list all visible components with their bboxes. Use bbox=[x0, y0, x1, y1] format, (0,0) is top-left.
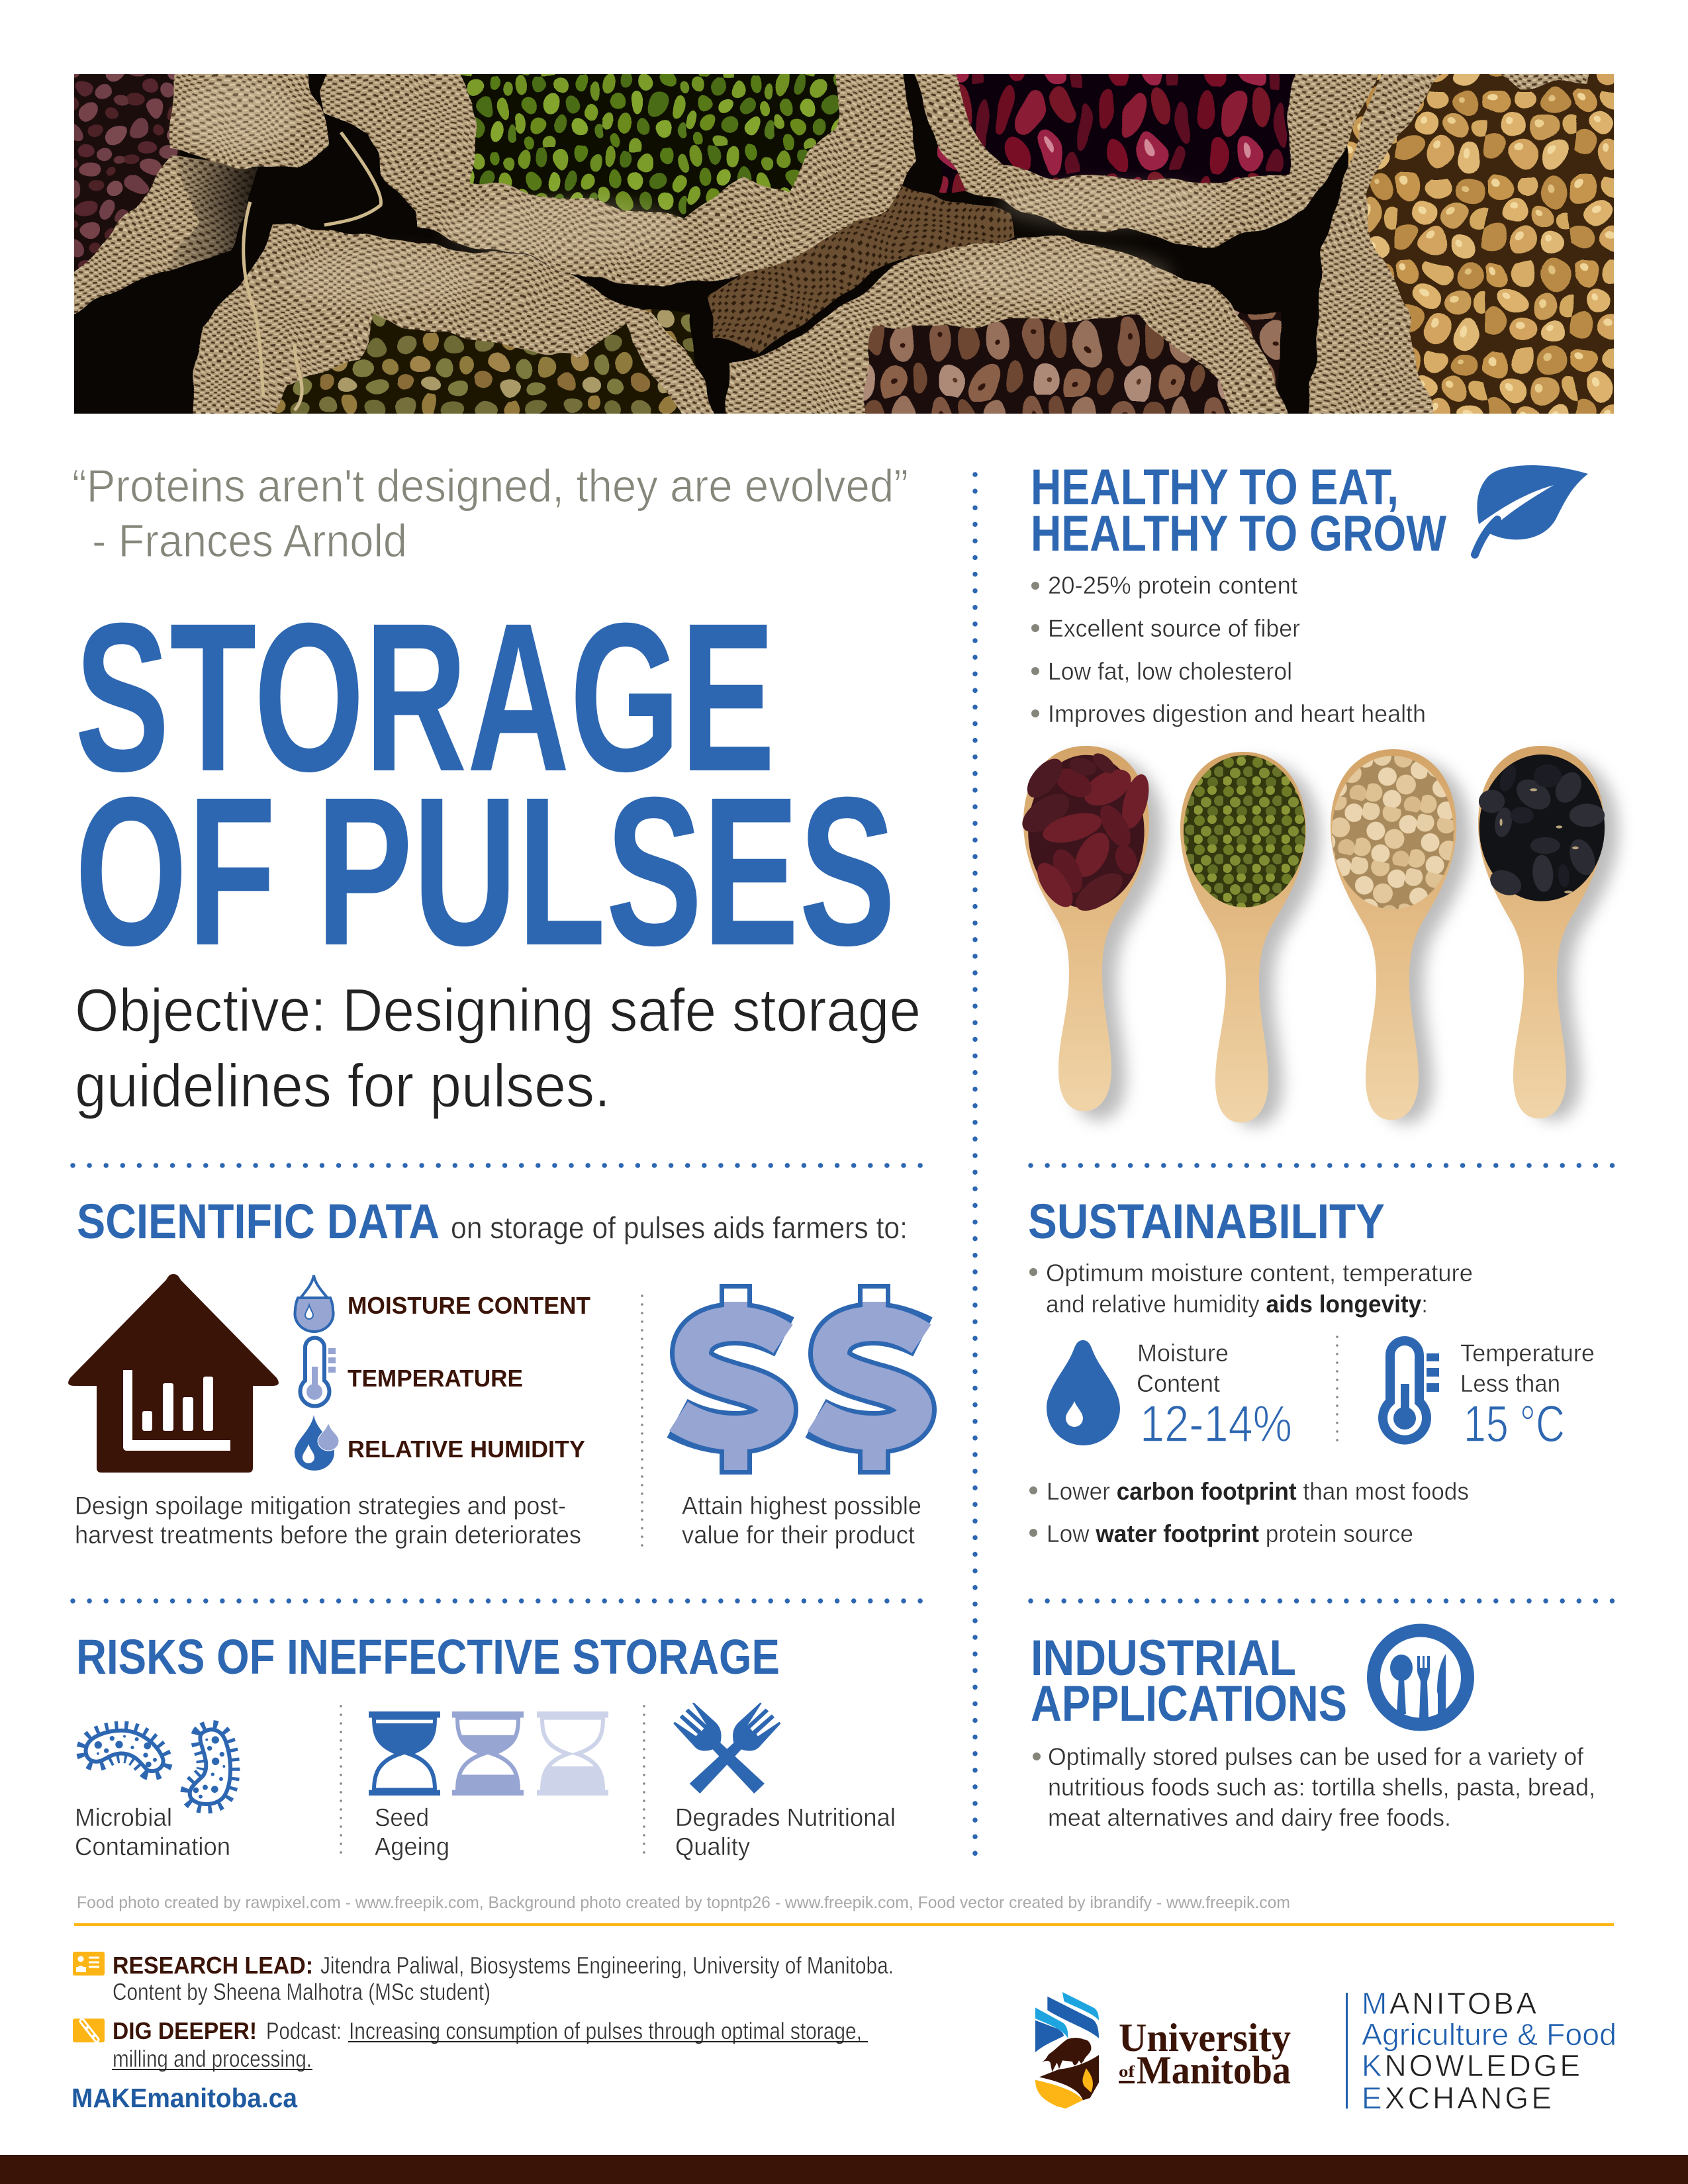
stat: temperature: Less than bbox=[1460, 1370, 1560, 1397]
bullet list: health benefits: 20-25% protein content bbox=[1048, 572, 1298, 599]
label: degrades nutritional quality: Degrades Nutritional bbox=[675, 1804, 896, 1832]
heading: healthy to eat: HEALTHY TO EAT, bbox=[1031, 459, 1399, 516]
text: industrial uses bullet: nutritious foods such as: tortilla shells, pasta, bread, bbox=[1048, 1774, 1595, 1801]
text: highest value bbox=[682, 1492, 921, 1549]
text: footprint bullets: Lower carbon footprint than most foods bbox=[1047, 1478, 1469, 1505]
bullet list: health benefits: Improves digestion and heart health bbox=[1048, 700, 1426, 727]
icon: bacteria bbox=[86, 1729, 230, 1804]
heading: healthy to eat: HEALTHY TO GROW bbox=[1031, 506, 1446, 562]
heading: scientific data: SCIENTIFIC DATA bbox=[77, 1194, 440, 1249]
icon: dollar signs bbox=[677, 1284, 923, 1475]
heading: industrial applications bbox=[1031, 1630, 1347, 1732]
icon: water drop bbox=[1047, 1340, 1120, 1445]
podcast text: dig deeper: Increasing consumption of pulses through optimal storage, bbox=[349, 2017, 862, 2044]
stat: temperature: 15 °C bbox=[1464, 1394, 1565, 1453]
icon: link bbox=[73, 2019, 105, 2042]
podcast text: dig deeper: DIG DEEPER! bbox=[113, 2017, 257, 2044]
text: longevity bullet: and relative humidity aids longevity: bbox=[1046, 1291, 1428, 1318]
label: moisture content: MOISTURE CONTENT bbox=[348, 1292, 590, 1319]
icon: plate and cutlery bbox=[1374, 1631, 1468, 1725]
heading: scientific data: on storage of pulses aids farmers to: bbox=[451, 1210, 908, 1245]
label: microbial contamination bbox=[75, 1804, 230, 1861]
bullet list: health benefits: Excellent source of fiber bbox=[1048, 615, 1300, 642]
stat: moisture content: Content bbox=[1137, 1370, 1221, 1397]
icon: humidity drops bbox=[295, 1415, 339, 1471]
panel: sustainability bbox=[1028, 1194, 1595, 1547]
photo credits: Food photo created by rawpixel.com - www.freepik.com, Background photo created by topntp26 - www.freepik.com, Food vector created by ibrandify - www.freepik.com bbox=[77, 1893, 1290, 1912]
icon: thermometer small bbox=[300, 1338, 336, 1406]
bullet list: health benefits: Low fat, low cholesterol bbox=[1048, 658, 1292, 685]
text: footprint bullets: Low water footprint protein source bbox=[1047, 1520, 1413, 1547]
shield emblem bbox=[1035, 1992, 1099, 2109]
text: industrial uses bullet: meat alternatives and dairy free foods. bbox=[1048, 1804, 1451, 1831]
podcast text: dig deeper: Podcast: bbox=[266, 2017, 342, 2044]
logo: Manitoba Agriculture & Food Knowledge Exchange: MANITOBA bbox=[1362, 1986, 1536, 2021]
quote bbox=[72, 460, 908, 567]
objective: Objective: Designing safe storage bbox=[75, 977, 921, 1044]
wordmark: University bbox=[1119, 2016, 1291, 2060]
text: longevity bullet: Optimum moisture content, temperature bbox=[1046, 1259, 1473, 1287]
label: degrades nutritional quality: Quality bbox=[675, 1833, 750, 1861]
credit text: research lead bbox=[113, 1952, 894, 2005]
stat: moisture content: Moisture bbox=[1137, 1340, 1229, 1367]
objective bbox=[75, 977, 921, 1120]
quote: “Proteins aren't designed, they are evolved” bbox=[72, 460, 908, 512]
heading: sustainability: SUSTAINABILITY bbox=[1028, 1194, 1385, 1249]
spoon: mung beans bbox=[1180, 752, 1321, 1126]
credit text: research lead: RESEARCH LEAD: bbox=[113, 1952, 313, 1979]
spoon: soybeans bbox=[1331, 749, 1471, 1124]
hero photo: burlap sacks of pulses bbox=[74, 74, 1614, 414]
bullet list: health benefits bbox=[1031, 572, 1426, 727]
heading: healthy to eat bbox=[1031, 459, 1446, 562]
wordmark: of bbox=[1119, 2064, 1135, 2081]
spoon: kidney beans bbox=[1015, 746, 1164, 1120]
text: spoilage strategies bbox=[75, 1492, 581, 1549]
icon: thermometer bbox=[1383, 1341, 1439, 1440]
quote: - Frances Arnold bbox=[92, 515, 407, 567]
text: highest value: Attain highest possible bbox=[682, 1492, 921, 1520]
objective: guidelines for pulses. bbox=[75, 1052, 610, 1120]
label: relative humidity: RELATIVE HUMIDITY bbox=[348, 1435, 585, 1463]
stat: moisture content bbox=[1137, 1340, 1292, 1453]
panel: healthy to eat bbox=[1015, 459, 1618, 1126]
text: spoilage strategies: harvest treatments before the grain deteriorates bbox=[75, 1522, 581, 1549]
heading: risks: RISKS OF INEFFECTIVE STORAGE bbox=[76, 1629, 780, 1684]
text: industrial uses bullet bbox=[1033, 1743, 1595, 1831]
icon: moisture drop bbox=[295, 1275, 333, 1332]
title: STORAGE bbox=[75, 578, 775, 815]
icon: research lead bbox=[73, 1952, 105, 1976]
heading: industrial applications: INDUSTRIAL bbox=[1031, 1630, 1296, 1686]
logo: Manitoba Agriculture & Food Knowledge Exchange: EXCHANGE bbox=[1362, 2081, 1552, 2115]
podcast text: dig deeper: milling and processing. bbox=[113, 2045, 312, 2072]
text: spoilage strategies: Design spoilage mitigation strategies and post- bbox=[75, 1492, 566, 1520]
wordmark: Manitoba bbox=[1137, 2048, 1291, 2092]
label: degrades nutritional quality bbox=[675, 1804, 896, 1861]
stat: temperature: Temperature bbox=[1460, 1340, 1595, 1367]
credit text: research lead: Jitendra Paliwal, Biosystems Engineering, University of Manitoba. bbox=[320, 1952, 894, 1979]
gold divider bbox=[74, 1923, 1614, 1926]
podcast text: dig deeper bbox=[112, 2017, 868, 2072]
text: industrial uses bullet: Optimally stored pulses can be used for a variety of bbox=[1048, 1743, 1584, 1770]
text: highest value: value for their product bbox=[682, 1522, 915, 1549]
logo: University of Manitoba bbox=[1035, 1992, 1291, 2109]
label: seed ageing: Seed bbox=[375, 1804, 429, 1832]
label: seed ageing: Ageing bbox=[375, 1833, 449, 1861]
heading: scientific data bbox=[77, 1194, 908, 1249]
wordmark bbox=[1119, 2016, 1291, 2092]
icon: hourglasses bbox=[369, 1711, 608, 1796]
title bbox=[75, 578, 896, 989]
icon: crossed forks bbox=[673, 1703, 780, 1794]
label: temperature: TEMPERATURE bbox=[348, 1365, 523, 1392]
panel: industrial applications bbox=[1031, 1630, 1595, 1831]
credit text: research lead: Content by Sheena Malhotra (MSc student) bbox=[113, 1978, 491, 2005]
logo: Manitoba Agriculture & Food Knowledge Exchange: KNOWLEDGE bbox=[1362, 2048, 1580, 2083]
panel: risks of ineffective storage bbox=[75, 1629, 896, 1861]
website link: MAKEmanitoba.ca bbox=[71, 2083, 298, 2113]
stat: temperature bbox=[1460, 1340, 1595, 1453]
footer bar bbox=[0, 2155, 1688, 2184]
label: microbial contamination: Contamination bbox=[75, 1833, 230, 1861]
icon: house with bar chart bbox=[68, 1274, 279, 1473]
label: microbial contamination: Microbial bbox=[75, 1804, 172, 1832]
label: seed ageing bbox=[375, 1804, 449, 1861]
icon: leaf bbox=[1475, 465, 1588, 555]
text: footprint bullets bbox=[1029, 1478, 1469, 1547]
panel: scientific data bbox=[68, 1194, 923, 1549]
logo: Manitoba Agriculture & Food Knowledge Exchange: Agriculture & Food bbox=[1362, 2017, 1617, 2052]
heading: industrial applications: APPLICATIONS bbox=[1031, 1676, 1347, 1732]
logo: Manitoba Agriculture & Food Knowledge Exchange bbox=[1346, 1986, 1617, 2115]
spoon: black beans bbox=[1478, 746, 1618, 1120]
title: OF PULSES bbox=[75, 752, 896, 989]
stat: moisture content: 12-14% bbox=[1140, 1394, 1292, 1453]
text: longevity bullet bbox=[1029, 1259, 1473, 1318]
